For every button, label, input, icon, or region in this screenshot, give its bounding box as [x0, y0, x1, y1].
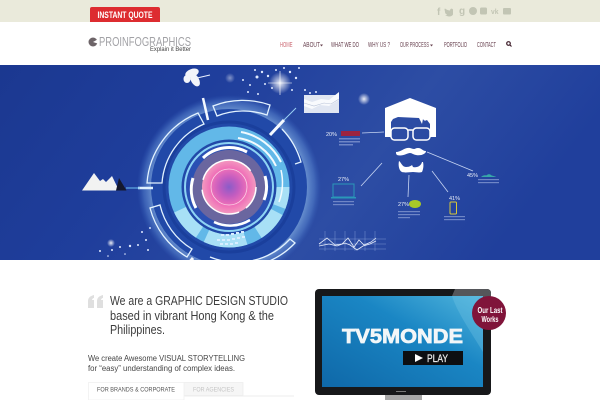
intro heading [110, 294, 288, 337]
intro text: We create Awesome VISUAL STORYTELLING [88, 354, 245, 363]
callout: 20% [326, 131, 360, 146]
social icons: g [459, 6, 465, 17]
icon: hipster head [385, 98, 436, 172]
radial tech dial [126, 97, 318, 260]
icon: quote marks [88, 295, 103, 308]
tabs [88, 382, 294, 400]
callout: 27% lime: 27% [398, 202, 409, 208]
callout: 41% phone: 41% [449, 196, 460, 202]
button: instant quote: INSTANT QUOTE [98, 10, 152, 20]
tabs: FOR BRANDS & CORPORATE [97, 388, 175, 394]
callout: 45%: 45% [467, 173, 478, 179]
chart: area thumbnail [304, 92, 339, 113]
outer arcs [147, 100, 301, 268]
navigation: PORTFOLIO [444, 40, 467, 49]
tabs: FOR AGENCIES [193, 388, 234, 394]
hero banner [0, 65, 600, 279]
icon: beard [399, 161, 423, 172]
play button: PLAY [427, 353, 449, 365]
play button [403, 351, 463, 365]
top bar [0, 0, 600, 22]
navigation: WHAT WE DO [331, 40, 359, 49]
spokes [203, 98, 208, 120]
social icons: f [437, 7, 441, 18]
button: instant quote [90, 7, 160, 22]
navigation: HOME [280, 40, 292, 49]
logo: Explain it Better [150, 46, 192, 53]
intro heading: based in vibrant Hong Kong & the [110, 309, 274, 323]
callout: 27% lime [398, 200, 421, 218]
social icons [437, 6, 511, 18]
callout: 27% laptop: 27% [338, 177, 349, 183]
icon: search [507, 42, 512, 46]
intro heading: We are a GRAPHIC DESIGN STUDIO [110, 294, 288, 308]
icon: mountains [82, 173, 126, 190]
connectors [361, 132, 473, 197]
navigation: WHY US ? [368, 40, 390, 49]
intro text: for “easy” understanding of complex ideas. [88, 364, 235, 373]
icon: satellite [184, 68, 210, 86]
sparkles [99, 67, 370, 257]
badge: our last works [472, 296, 506, 330]
navigation [280, 40, 496, 49]
badge: our last works: Our Last [478, 305, 503, 315]
icon: moustache [396, 148, 426, 156]
callout: 45% [467, 173, 499, 183]
chart: line graph [319, 231, 386, 251]
white dashed ring [185, 143, 273, 231]
logo [88, 35, 192, 53]
callout: 20%: 20% [326, 132, 337, 138]
monitor [315, 289, 491, 400]
blue band [175, 133, 283, 241]
intro heading: Philippines. [110, 323, 165, 337]
intro text [88, 354, 245, 373]
badge: our last works: Works [482, 314, 499, 324]
logo: PROINFOGRAPHICS [99, 35, 191, 49]
dots grid [217, 231, 245, 245]
navigation: OUR PROCESS [400, 40, 429, 49]
navigation: ABOUT [303, 40, 320, 49]
callout: 27% laptop [331, 177, 356, 205]
callout: 41% phone [444, 196, 465, 220]
monitor: TV5MONDE [342, 326, 463, 348]
icon: glasses [387, 128, 433, 140]
social icons: vk [491, 9, 499, 16]
navigation: CONTACT [477, 40, 496, 49]
